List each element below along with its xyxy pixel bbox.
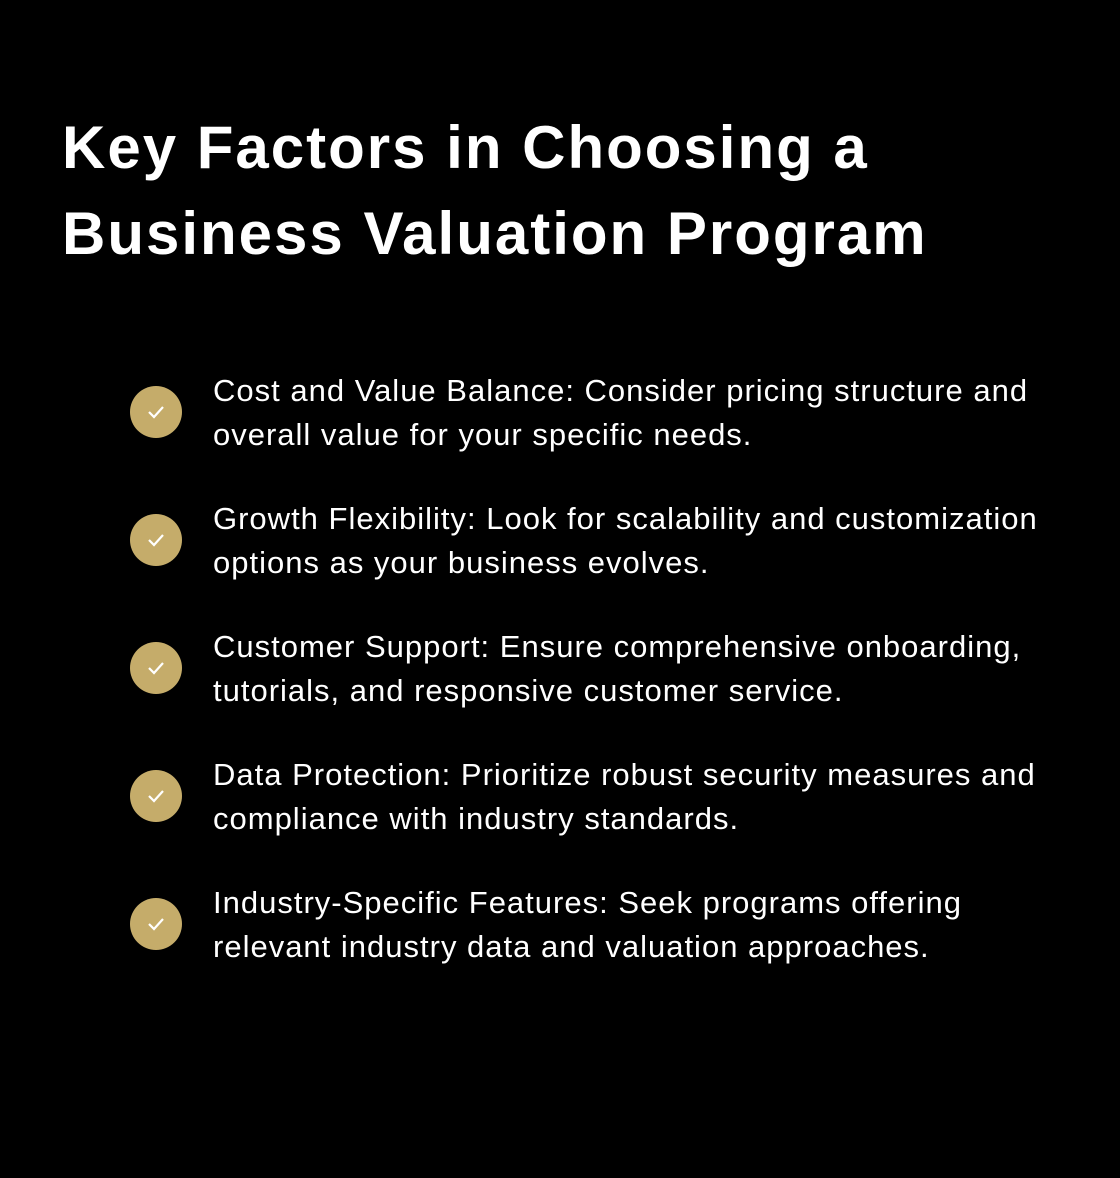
text: Growth Flexibility: Look for scalability and customization: [213, 501, 1038, 536]
icon: check: [130, 898, 182, 950]
icon: check: [130, 642, 182, 694]
item: data protection: [130, 757, 1036, 836]
icon: check: [130, 386, 182, 438]
text: [213, 373, 1028, 452]
title: [62, 114, 928, 267]
text: options as your business evolves.: [213, 545, 710, 580]
text: compliance with industry standards.: [213, 801, 739, 836]
item: growth flexibility: [130, 501, 1038, 580]
text: [213, 885, 962, 964]
item: cost and value: [130, 373, 1028, 452]
text: [213, 629, 1021, 708]
icon: check: [130, 770, 182, 822]
icon: check: [130, 514, 182, 566]
item: customer support: [130, 629, 1021, 708]
text: Industry-Specific Features: Seek programs offering: [213, 885, 962, 920]
item: industry-specific: [130, 885, 962, 964]
text: Customer Support: Ensure comprehensive onboarding,: [213, 629, 1021, 664]
text: tutorials, and responsive customer service.: [213, 673, 844, 708]
text: Data Protection: Prioritize robust security measures and: [213, 757, 1036, 792]
title: Key Factors in Choosing a: [62, 114, 869, 181]
text: overall value for your specific needs.: [213, 417, 752, 452]
title: Business Valuation Program: [62, 200, 928, 267]
text: Cost and Value Balance: Consider pricing structure and: [213, 373, 1028, 408]
text: [213, 501, 1038, 580]
text: relevant industry data and valuation approaches.: [213, 929, 930, 964]
text: [213, 757, 1036, 836]
